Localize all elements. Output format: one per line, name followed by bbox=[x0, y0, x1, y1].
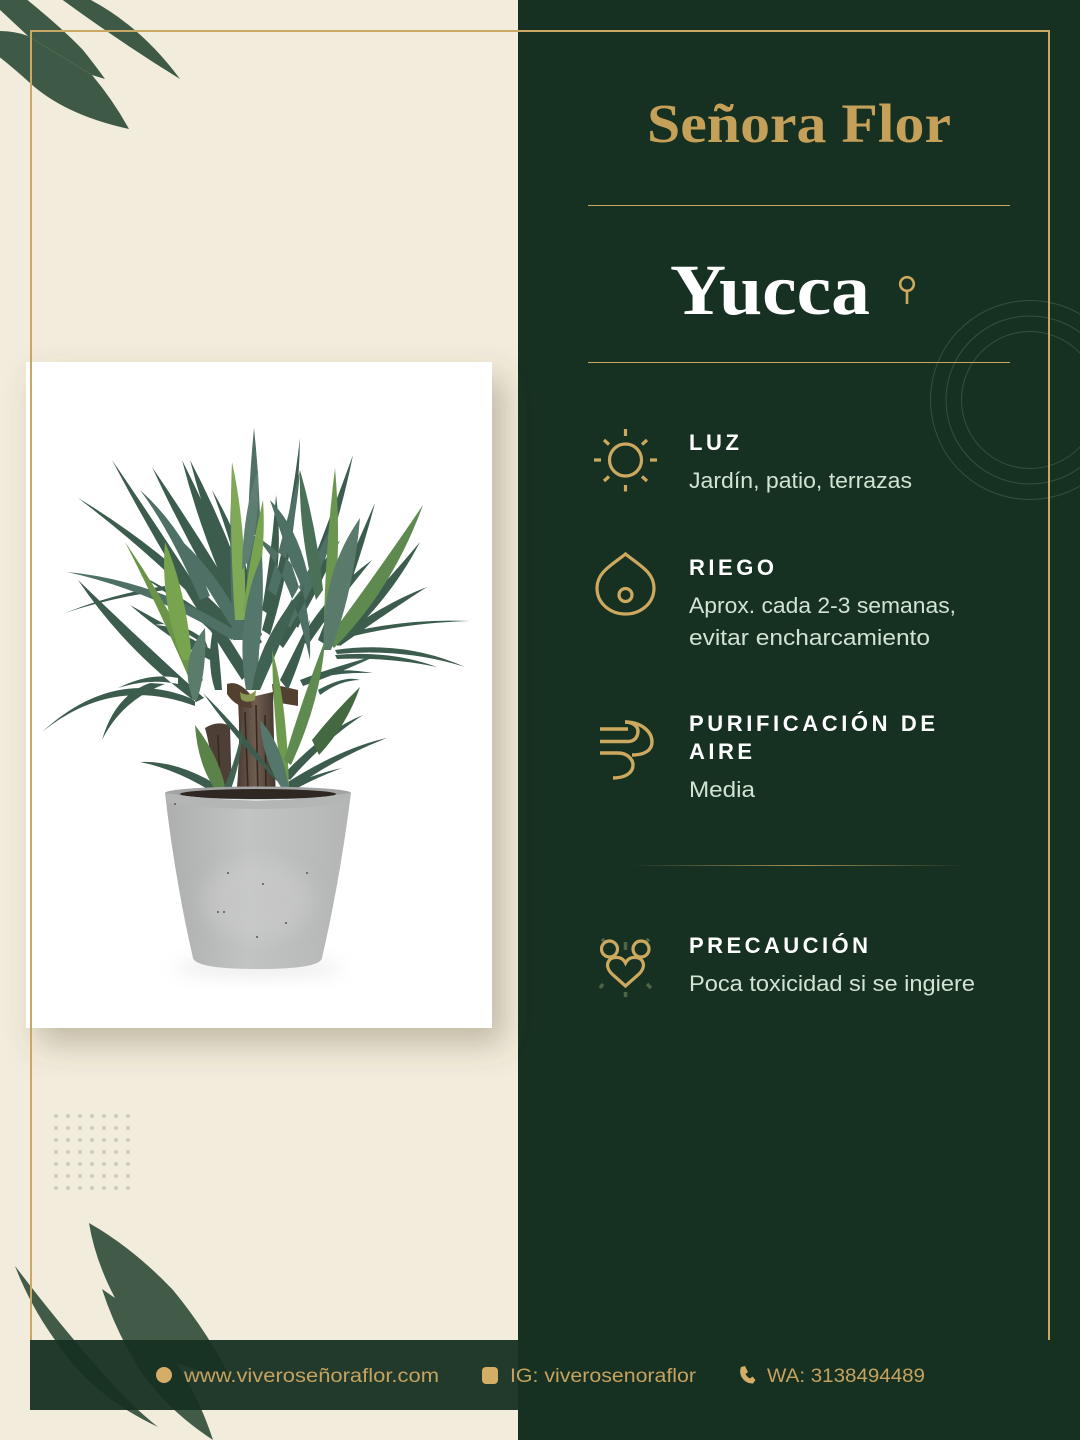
brand title: Señora Flor bbox=[647, 93, 951, 154]
footer: instagram: IG: viverosenoraflor bbox=[510, 1366, 697, 1387]
photo card: potted yucca bbox=[26, 362, 492, 1028]
panel: dark green background bbox=[518, 0, 1080, 1440]
trunk bbox=[205, 683, 298, 798]
icon: plant gender symbol bbox=[900, 277, 914, 304]
divider bottom bbox=[588, 362, 1010, 363]
decorative leaves: bottom left bbox=[15, 1223, 233, 1440]
section: luz: Jardín, patio, terrazas bbox=[689, 468, 912, 493]
section: riego bbox=[689, 555, 956, 650]
concrete pot bbox=[165, 786, 351, 969]
yucca leaves bbox=[42, 428, 470, 797]
decorative leaves: top left bbox=[0, 0, 180, 129]
icon: heart caution bbox=[600, 939, 651, 997]
icon: sun bbox=[594, 429, 657, 492]
divider middle bbox=[630, 865, 965, 866]
section: riego: evitar encharcamiento bbox=[689, 625, 930, 650]
panel: cream background bbox=[0, 0, 518, 1440]
footer: website: www.viveroseñoraflor.com bbox=[183, 1366, 439, 1387]
section: precaucion bbox=[689, 933, 975, 996]
plant name: Yucca bbox=[670, 250, 870, 330]
decorative dot grid bbox=[54, 1114, 130, 1190]
footer: whatsapp: WA: 3138494489 bbox=[767, 1366, 925, 1387]
footer bar bbox=[30, 1340, 1050, 1410]
section: luz bbox=[689, 430, 912, 493]
section: precaucion: Poca toxicidad si se ingiere bbox=[689, 971, 975, 996]
section: purificacion de aire: AIRE bbox=[689, 739, 752, 764]
pot ground shadow bbox=[173, 961, 343, 975]
section: luz: LUZ bbox=[689, 430, 739, 455]
section: purificacion de aire: PURIFICACIÓN DE bbox=[689, 711, 935, 736]
section: purificacion de aire: Media bbox=[689, 777, 756, 802]
section: purificacion de aire bbox=[689, 711, 935, 802]
section: riego: RIEGO bbox=[689, 555, 774, 580]
section: riego: Aprox. cada 2-3 semanas, bbox=[689, 593, 956, 618]
section: precaucion: PRECAUCIÓN bbox=[689, 933, 868, 958]
divider top bbox=[588, 205, 1010, 206]
decorative concentric circles bbox=[930, 300, 1080, 500]
icon: water drop bbox=[597, 554, 654, 614]
icon: wind bbox=[600, 722, 652, 778]
